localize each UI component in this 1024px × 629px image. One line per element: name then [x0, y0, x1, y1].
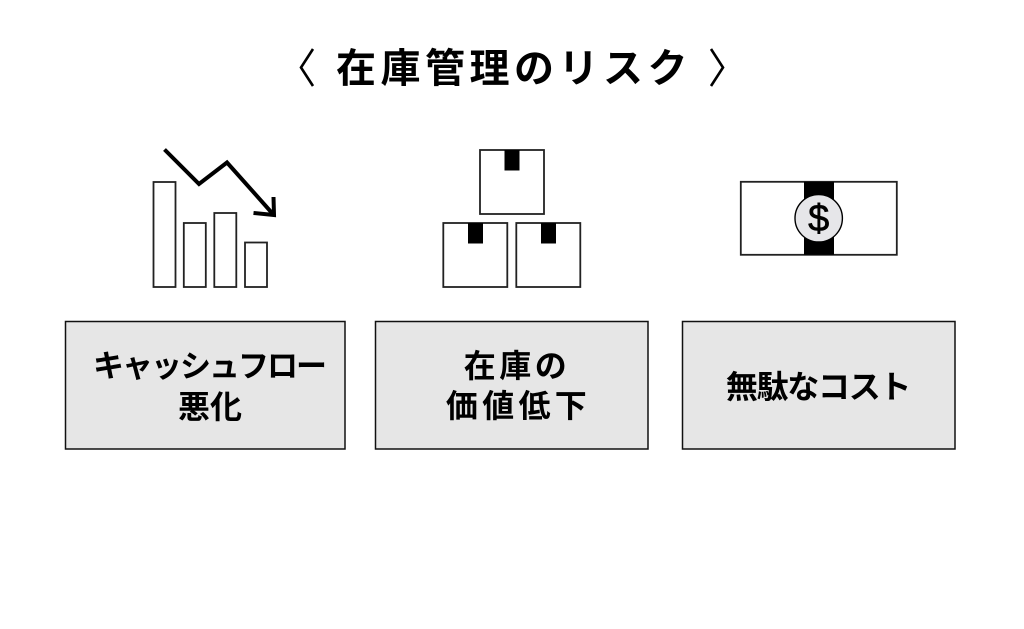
- icon: falling bar chart: [154, 150, 274, 287]
- panel: cash flow deterioration: [66, 322, 345, 449]
- title: 在庫管理のリスク: [336, 36, 692, 94]
- panel: cash flow deterioration: キャッシュフロー: [93, 341, 325, 386]
- icon: banknote: [741, 182, 897, 255]
- icon: stacked boxes: [443, 150, 580, 287]
- panel: inventory value decline: 価値低下: [446, 381, 591, 427]
- panel: wasteful cost: 無駄なコスト: [726, 362, 910, 408]
- panel: inventory value decline: 在庫の: [464, 341, 570, 387]
- panel: cash flow deterioration: 悪化: [178, 382, 242, 428]
- icon: banknote: $: [808, 198, 829, 240]
- panel: inventory value decline: [376, 322, 648, 449]
- panel: wasteful cost: [682, 322, 955, 449]
